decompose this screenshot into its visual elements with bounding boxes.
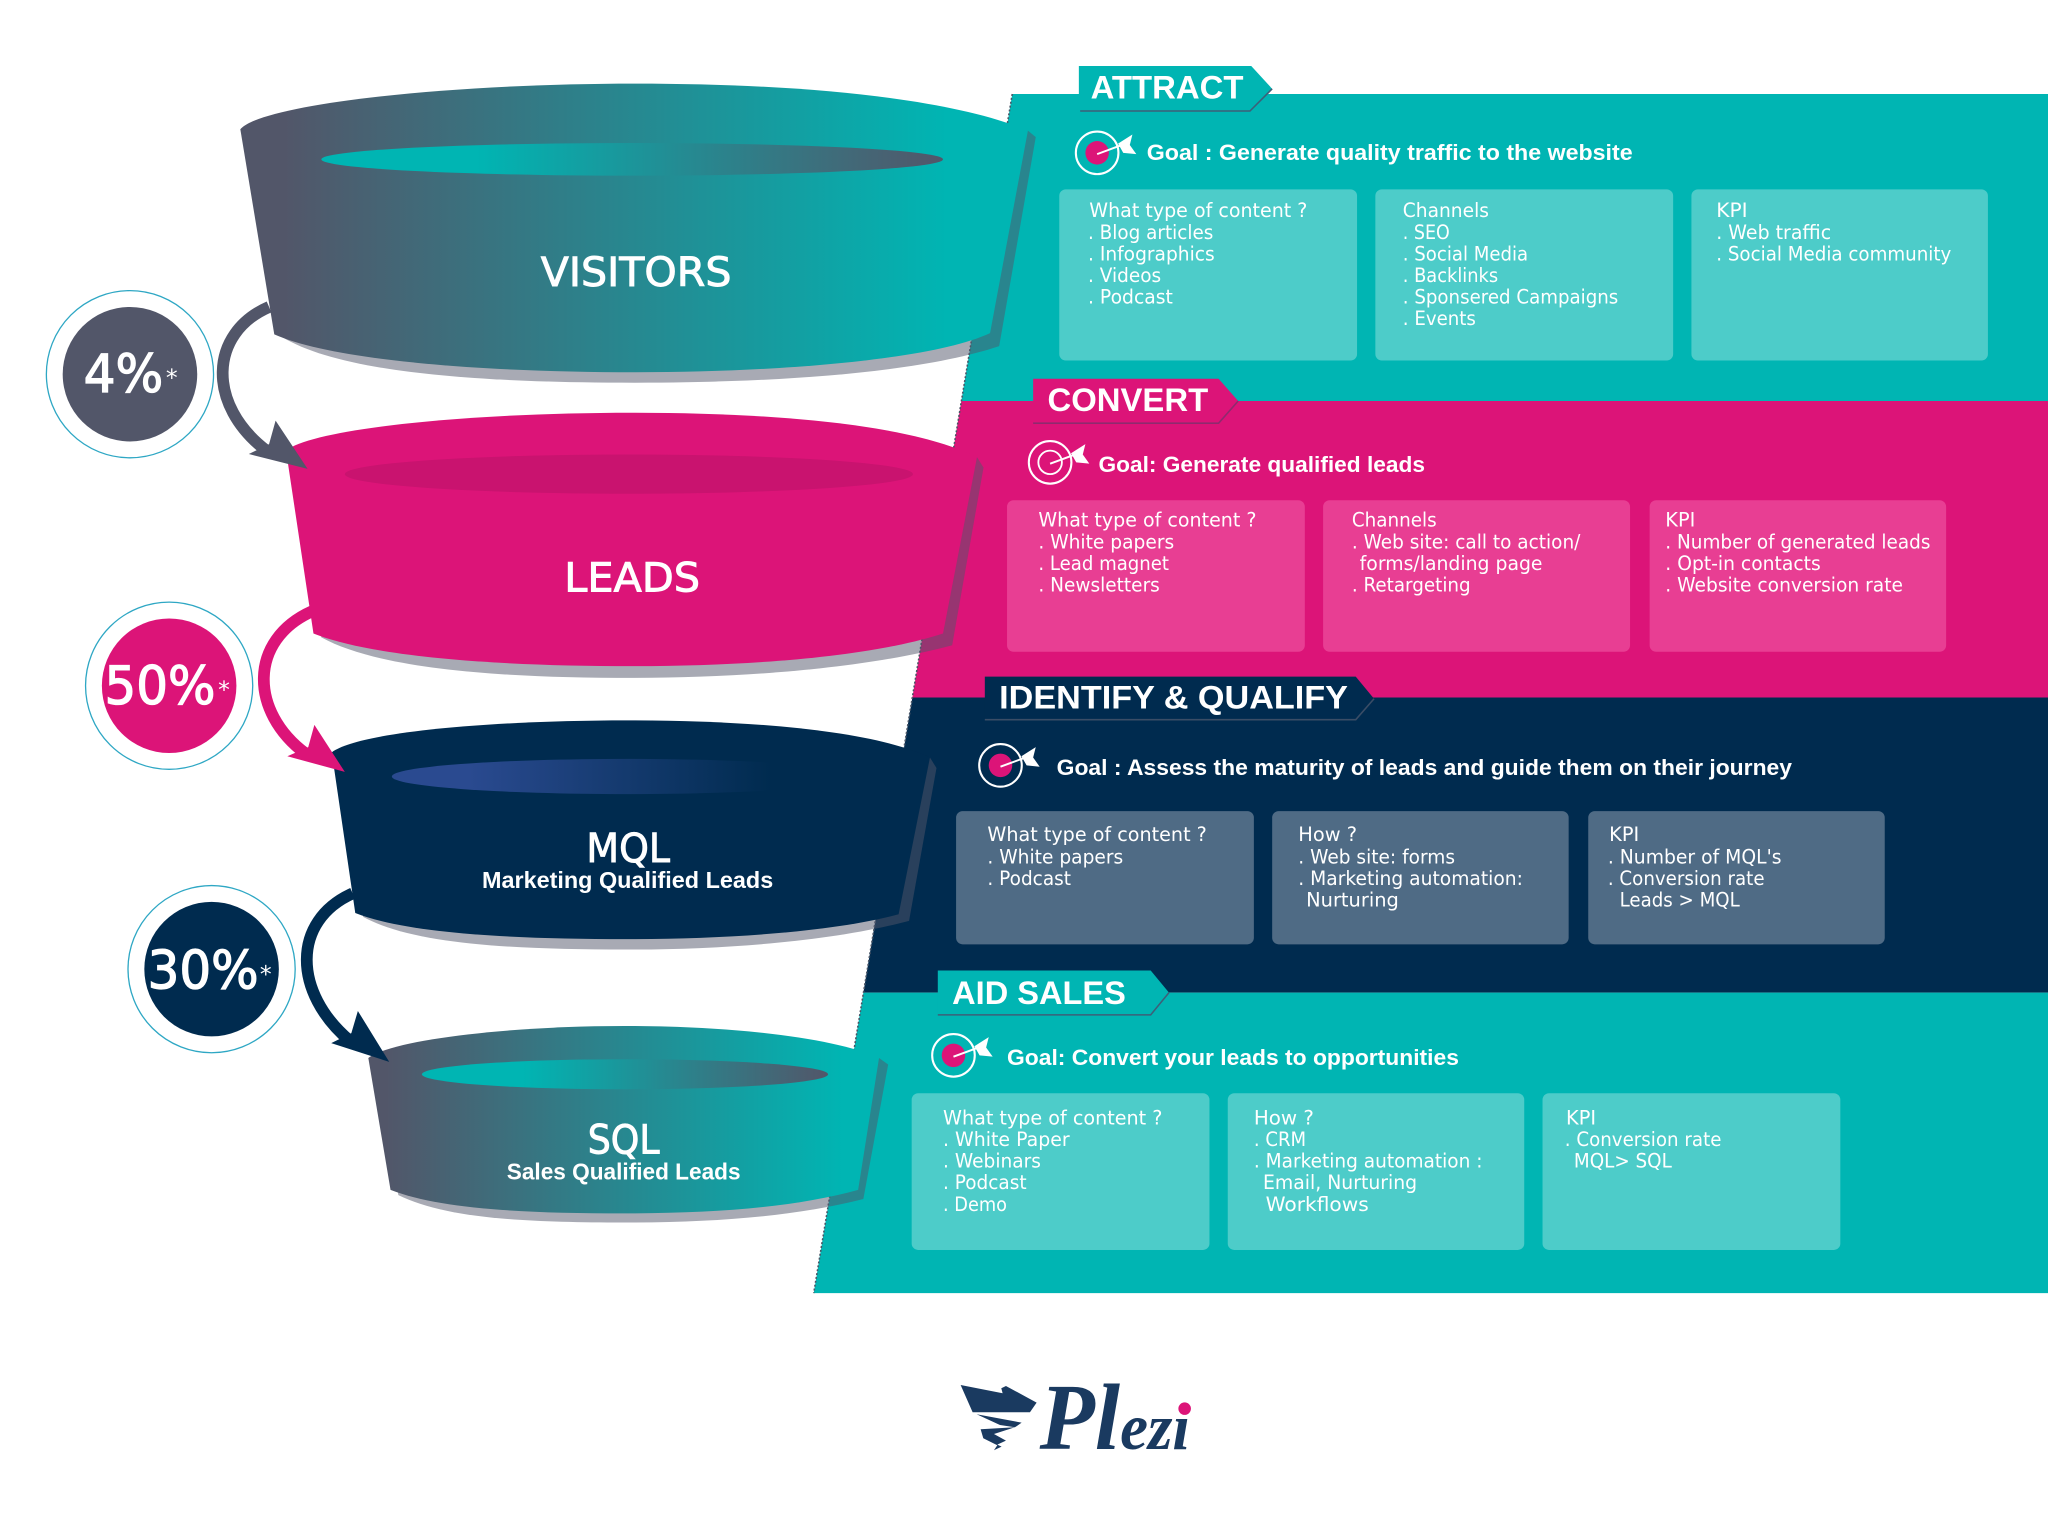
card: how xyxy=(1228,1093,1524,1250)
tab: convert: CONVERT xyxy=(1048,381,1208,418)
icon: target xyxy=(932,1034,993,1077)
card: how: . CRM xyxy=(1254,1128,1306,1151)
badge: 50 percent xyxy=(86,602,253,769)
card: content: What type of content ? xyxy=(987,823,1207,846)
tab: attract: ATTRACT xyxy=(1091,69,1243,106)
icon: target xyxy=(1029,441,1089,484)
funnel stage: mql: MQL xyxy=(586,824,670,872)
badge: 4 percent: * xyxy=(166,363,178,391)
card: kpi: . Website conversion rate xyxy=(1665,574,1903,597)
card: content: . Newsletters xyxy=(1038,574,1160,597)
card: kpi: KPI xyxy=(1665,508,1695,531)
card: how: . Marketing automation: xyxy=(1298,867,1523,890)
tab: aid sales: AID SALES xyxy=(952,974,1126,1011)
card: content: . Blog articles xyxy=(1088,221,1213,244)
goal text: Goal : Generate quality traffic to the website xyxy=(1147,140,1633,165)
card: how: . Web site: forms xyxy=(1298,845,1455,868)
tab: identify and qualify: IDENTIFY & QUALIFY xyxy=(999,679,1348,716)
card: channels: forms/landing page xyxy=(1360,552,1543,575)
badge: 30 percent: * xyxy=(260,960,272,988)
card: kpi: . Social Media community xyxy=(1716,243,1951,266)
funnel stage: sql xyxy=(368,1026,888,1223)
card: content: . Lead magnet xyxy=(1038,552,1169,575)
card: content: . Webinars xyxy=(943,1150,1041,1173)
badge: 50 percent: * xyxy=(218,675,230,703)
panel: convert xyxy=(912,379,2048,697)
tab: convert xyxy=(1033,379,1238,423)
panel: aid sales xyxy=(814,970,2048,1293)
card: content xyxy=(956,811,1254,944)
card: how: Email, Nurturing xyxy=(1263,1171,1417,1194)
card: content: . Podcast xyxy=(943,1171,1027,1194)
card: channels: . SEO xyxy=(1403,221,1450,244)
badge: 30 percent xyxy=(128,886,295,1053)
funnel edge: dotted line xyxy=(814,94,1012,1293)
card: content: . Podcast xyxy=(987,867,1071,890)
funnel stage: visitors xyxy=(240,84,1036,383)
badge: 4 percent: 4% xyxy=(84,345,163,405)
card: content: . White papers xyxy=(1038,531,1174,554)
tab: aid sales xyxy=(938,970,1169,1015)
panel: identify and qualify xyxy=(863,677,2048,993)
card: content: . Videos xyxy=(1088,264,1161,287)
card: content: What type of content ? xyxy=(1089,199,1307,222)
logo: Plezi: Plezi xyxy=(1039,1366,1190,1470)
card: content: . White papers xyxy=(987,845,1123,868)
card: channels: Channels xyxy=(1403,199,1489,222)
card: content: What type of content ? xyxy=(1038,508,1256,531)
funnel stage: sql: Sales Qualified Leads xyxy=(507,1158,741,1184)
card: how: Nurturing xyxy=(1306,888,1399,911)
arrow: mql to sql xyxy=(307,893,389,1062)
card: content: What type of content ? xyxy=(943,1107,1162,1130)
card: content: . Infographics xyxy=(1088,243,1215,266)
card: channels: Channels xyxy=(1352,508,1437,531)
card: content: . Podcast xyxy=(1088,286,1173,309)
arrow: leads to mql xyxy=(264,611,345,772)
logo: Plezi xyxy=(961,1366,1191,1470)
card: kpi: MQL> SQL xyxy=(1574,1150,1672,1173)
card: channels: . Retargeting xyxy=(1352,574,1471,597)
tab: attract xyxy=(1079,66,1272,111)
badge: 4 percent xyxy=(46,291,214,458)
funnel stage: mql xyxy=(332,720,936,950)
card: how: . Marketing automation : xyxy=(1254,1150,1482,1173)
card: channels: . Social Media xyxy=(1403,243,1528,266)
card: kpi xyxy=(1650,500,1946,652)
card: kpi: . Conversion rate xyxy=(1565,1128,1721,1151)
goal text: Goal: Generate qualified leads xyxy=(1098,452,1425,477)
card: kpi: . Number of generated leads xyxy=(1665,531,1930,554)
badge: 30 percent: 30% xyxy=(148,942,259,1002)
goal text: Goal : Assess the maturity of leads and guide them on their journey xyxy=(1057,755,1793,780)
card: kpi: KPI xyxy=(1609,823,1639,846)
card: kpi: . Conversion rate xyxy=(1608,867,1765,890)
card: channels xyxy=(1375,189,1673,360)
card: channels xyxy=(1323,500,1630,652)
card: how xyxy=(1272,811,1569,944)
card: channels: . Events xyxy=(1403,307,1476,330)
card: how: How ? xyxy=(1254,1107,1314,1130)
card: kpi: . Web traffic xyxy=(1716,221,1831,244)
card: kpi xyxy=(1691,189,1988,360)
funnel stage: mql: Marketing Qualified Leads xyxy=(482,867,773,893)
arrow: visitors to leads xyxy=(223,307,308,469)
funnel stage: leads: LEADS xyxy=(564,554,700,602)
panel: attract xyxy=(961,66,2048,401)
card: content xyxy=(1007,500,1305,652)
card: channels: . Web site: call to action/ xyxy=(1352,531,1581,554)
card: content: . Demo xyxy=(943,1193,1007,1216)
card: channels: . Backlinks xyxy=(1403,264,1498,287)
card: how: Workflows xyxy=(1266,1193,1369,1216)
card: content: . White Paper xyxy=(943,1128,1070,1151)
card: content xyxy=(912,1093,1209,1250)
funnel stage: visitors: VISITORS xyxy=(541,248,731,296)
icon: target xyxy=(1076,132,1136,174)
card: kpi xyxy=(1543,1093,1840,1250)
badge: 50 percent: 50% xyxy=(104,657,216,717)
card: kpi: KPI xyxy=(1716,199,1748,222)
card: kpi: Leads > MQL xyxy=(1620,888,1740,911)
card: kpi: KPI xyxy=(1566,1107,1596,1130)
card: kpi xyxy=(1588,811,1885,944)
goal text: Goal: Convert your leads to opportunities xyxy=(1007,1045,1459,1070)
card: kpi: . Opt-in contacts xyxy=(1665,552,1821,575)
card: channels: . Sponsered Campaigns xyxy=(1403,286,1618,309)
funnel stage: leads xyxy=(286,413,984,678)
card: kpi: . Number of MQL's xyxy=(1608,845,1782,868)
card: content xyxy=(1059,189,1357,360)
card: how: How ? xyxy=(1298,823,1357,846)
funnel stage: sql: SQL xyxy=(588,1115,660,1163)
icon: target xyxy=(979,744,1040,787)
